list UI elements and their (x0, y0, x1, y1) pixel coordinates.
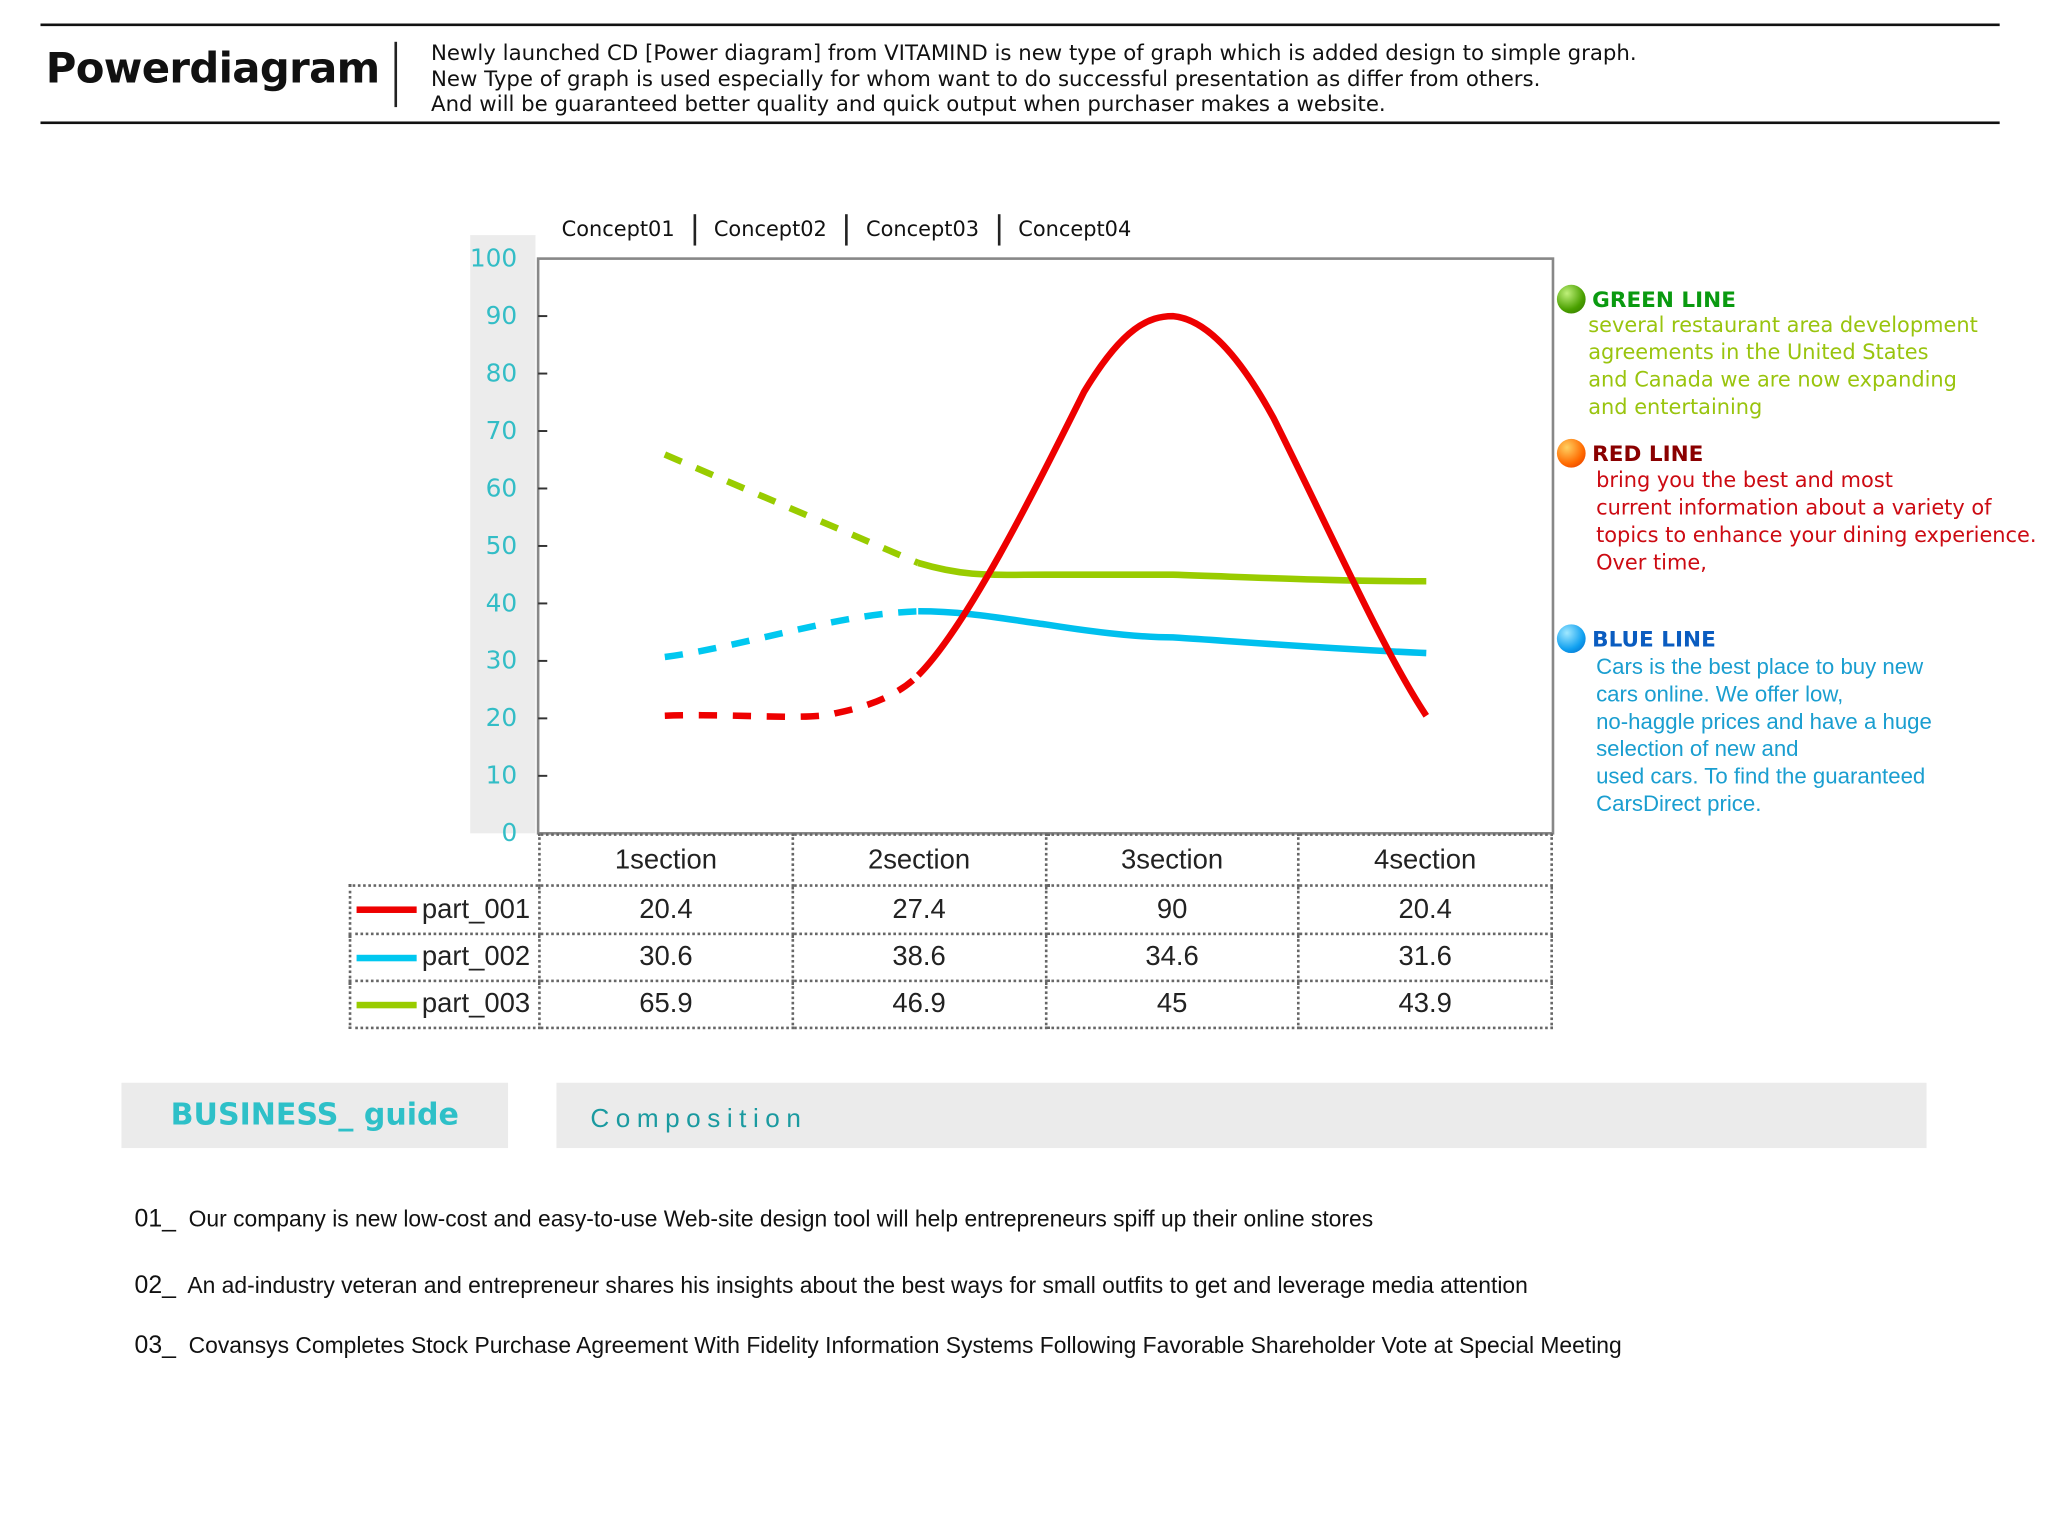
header description (431, 40, 1637, 117)
line chart: 30 (486, 646, 517, 675)
data table: 43.9 (1398, 989, 1452, 1019)
legend: green line: and entertaining (1588, 394, 1762, 419)
legend: red line: current information about a variety of (1596, 495, 1992, 520)
legend: green line: GREEN LINE (1592, 287, 1736, 312)
data table: 27.4 (892, 894, 946, 924)
legend: green line (1557, 285, 2048, 422)
header rules (40, 24, 2000, 26)
data table: 45 (1157, 989, 1187, 1019)
data table: 34.6 (1145, 942, 1199, 972)
title: Powerdiagram (46, 43, 380, 93)
data table: 20.4 (639, 894, 693, 924)
concept tabs: Concept01 Concept02 Concept03 Concept04 (562, 216, 1131, 241)
line chart: 0 (501, 818, 517, 847)
line chart: 10 (486, 761, 517, 790)
data table (349, 833, 1553, 1029)
line chart: 80 (486, 358, 517, 387)
business guide label (121, 1083, 508, 1148)
line chart: 50 (486, 531, 517, 560)
data table: 4section (1374, 844, 1476, 874)
legend: blue line (1557, 624, 2048, 820)
legend: green line: agreements in the United States (1588, 340, 1928, 364)
icon: blue ball (1557, 624, 1586, 653)
data table: 1section (615, 844, 717, 874)
text: 03_ Covansys Completes Stock Purchase Agreement With Fidelity Information Systems Following Favorable Shareholder Vote at Special Meeting (135, 1332, 1622, 1360)
composition bar: Composition (590, 1105, 807, 1134)
header description: New Type of graph is used especially for whom want to do successful presentation as differ from others. (431, 66, 1540, 91)
composition bar (556, 1083, 1927, 1148)
line chart: 100 (470, 243, 517, 272)
list items (134, 1205, 136, 1207)
legend: blue line: used cars. To find the guaranteed (1596, 764, 1925, 789)
line chart: 60 (486, 473, 517, 502)
legend: blue line: cars online. We offer low, (1596, 682, 1843, 707)
icon: orange ball (1557, 439, 1586, 468)
legend: blue line: no-haggle prices and have a huge (1596, 709, 1932, 734)
legend: red line: topics to enhance your dining experience. (1596, 522, 2037, 547)
data table: part_002 (422, 942, 530, 972)
data table: 30.6 (639, 942, 693, 972)
data table: 2section (868, 844, 970, 874)
data table: 38.6 (892, 942, 946, 972)
data table: 3section (1121, 844, 1223, 874)
text: 01_ Our company is new low-cost and easy-to-use Web-site design tool will help entrepreneurs spiff up their online stores (135, 1206, 1373, 1233)
line chart: 70 (486, 416, 517, 445)
legend: green line: several restaurant area development (1588, 312, 1978, 337)
header description: And will be guaranteed better quality and quick output when purchaser makes a website. (431, 91, 1386, 116)
line chart: 40 (486, 588, 517, 617)
business guide label: BUSINESS_ guide (171, 1098, 459, 1132)
line chart (0, 0, 2048, 914)
line chart: 20 (486, 703, 517, 732)
data table: 20.4 (1398, 894, 1452, 924)
legend: red line: bring you the best and most (1596, 468, 1893, 492)
line chart: 90 (486, 301, 517, 330)
data table: 65.9 (639, 989, 693, 1019)
header description: Newly launched CD [Power diagram] from VITAMIND is new type of graph which is added design to simple graph. (431, 40, 1637, 65)
legend: blue line: Cars is the best place to buy new (1596, 654, 1923, 679)
text: 02_ An ad-industry veteran and entrepreneur shares his insights about the best ways for small outfits to get and leverage media attention (135, 1272, 1528, 1300)
data table: 31.6 (1398, 942, 1452, 972)
legend: blue line: CarsDirect price. (1596, 792, 1761, 816)
data table: 46.9 (892, 989, 946, 1019)
data table: 90 (1157, 894, 1187, 924)
data table: part_001 (422, 894, 530, 924)
data table: part_003 (422, 989, 530, 1019)
icon: green ball (1557, 285, 1586, 313)
legend: red line: Over time, (1596, 550, 1707, 575)
legend: green line: and Canada we are now expanding (1588, 367, 1957, 392)
legend: blue line: selection of new and (1596, 737, 1799, 761)
legend: red line (1557, 439, 2048, 576)
legend: blue line: BLUE LINE (1592, 627, 1716, 652)
legend: red line: RED LINE (1592, 441, 1703, 466)
